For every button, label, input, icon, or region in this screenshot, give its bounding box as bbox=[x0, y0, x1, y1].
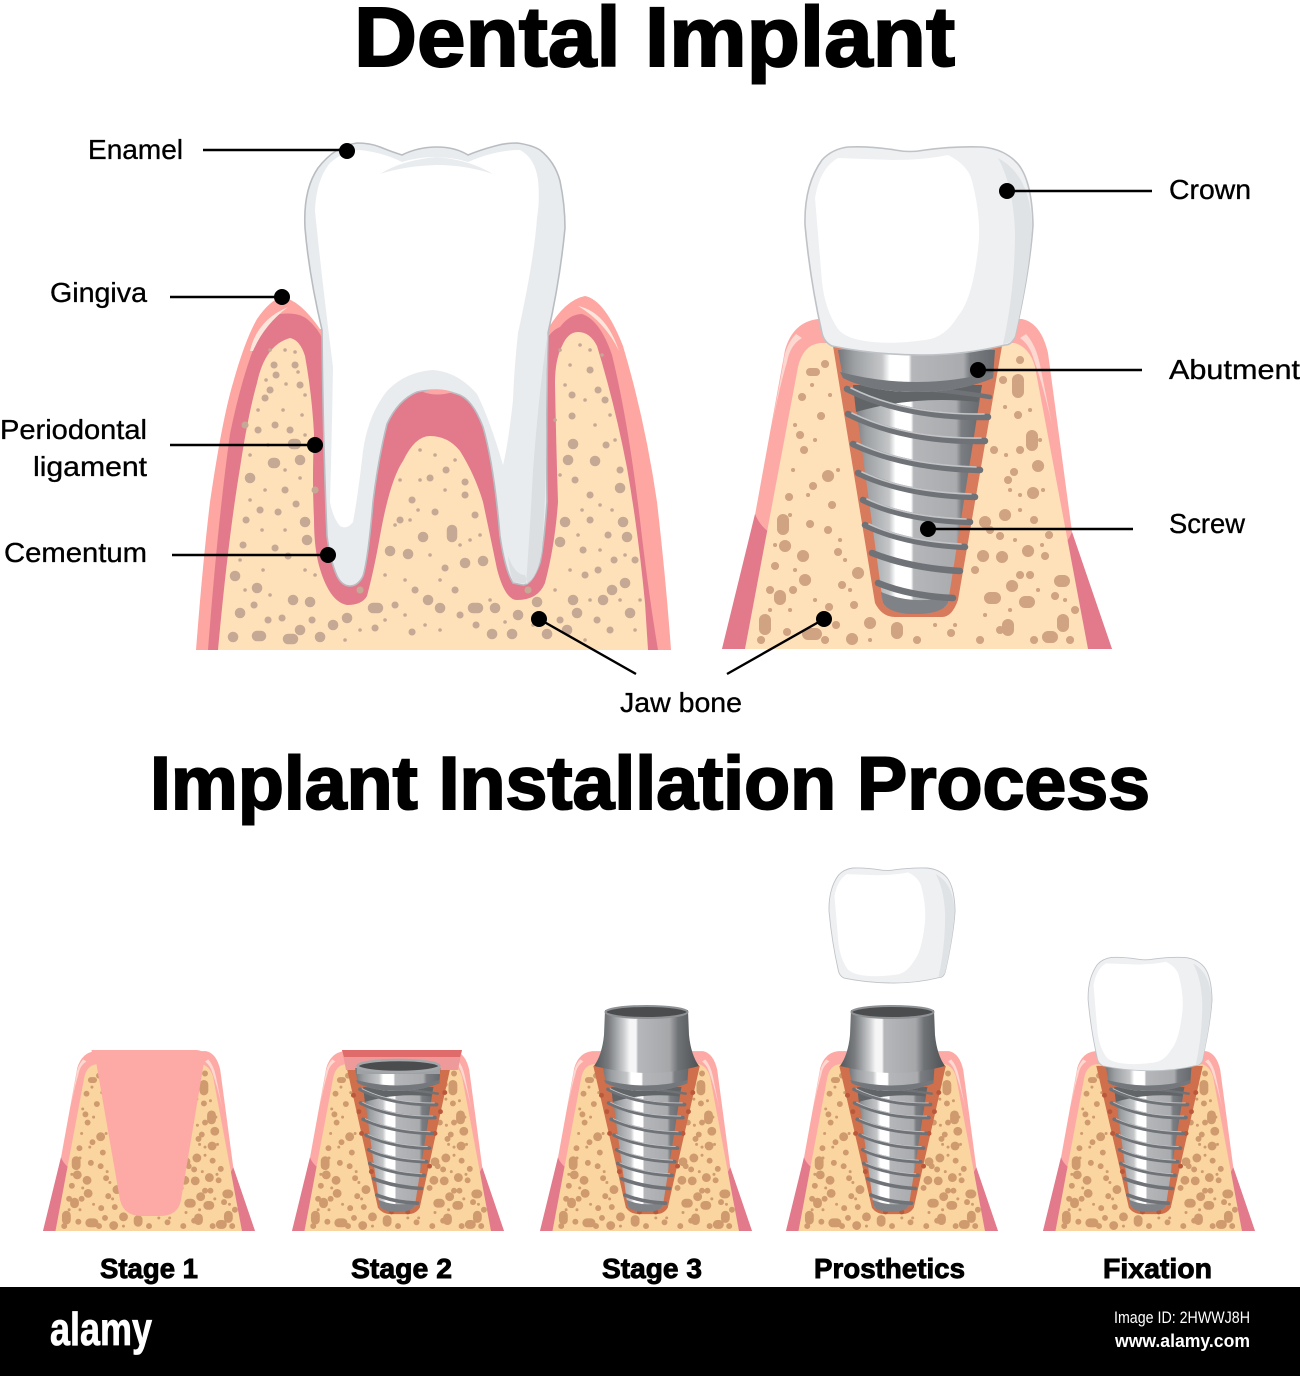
label: Gingiva: Gingiva bbox=[50, 277, 147, 308]
stage label: Stage 2: Stage 2 bbox=[351, 1253, 452, 1284]
label: Abutment bbox=[970, 354, 1300, 385]
label: Enamel: Enamel bbox=[88, 134, 183, 165]
stage label: Stage 3: Stage 3 bbox=[602, 1253, 702, 1284]
gum highlights bbox=[250, 306, 619, 351]
image id: Image ID: 2HWWJ8H bbox=[1114, 1308, 1250, 1327]
heading: Implant Installation Process: Implant Installation Process bbox=[150, 741, 1150, 825]
stage label: Stage 1: Stage 1 bbox=[100, 1253, 198, 1284]
label: Jaw bone bbox=[531, 611, 832, 718]
label: Screw bbox=[920, 508, 1246, 539]
bone specks bbox=[233, 345, 640, 640]
panel: implant anatomy bbox=[722, 147, 1112, 649]
label: Cementum: Cementum bbox=[4, 537, 147, 568]
stage label: Fixation: Fixation bbox=[1103, 1253, 1212, 1284]
crown bbox=[805, 147, 1033, 355]
label: Crown: Crown bbox=[1169, 174, 1251, 205]
label: Cementum bbox=[4, 537, 336, 568]
prosthetics diagram bbox=[786, 868, 998, 1231]
label: Periodontal ligament: ligament bbox=[33, 451, 147, 482]
website: www.alamy.com bbox=[1114, 1331, 1250, 1351]
panel: natural tooth anatomy bbox=[196, 143, 671, 650]
fixation diagram bbox=[1043, 957, 1255, 1231]
tooth white interior bbox=[315, 150, 539, 527]
interdental gum highlight bbox=[423, 390, 453, 394]
tooth shading bbox=[508, 332, 548, 584]
label: Enamel bbox=[88, 134, 355, 165]
stage 1 diagram bbox=[43, 1050, 255, 1231]
label: Gingiva bbox=[50, 277, 290, 308]
footer bar bbox=[0, 1287, 1300, 1376]
label: Abutment: Abutment bbox=[1169, 354, 1300, 385]
stage label: Prosthetics: Prosthetics bbox=[814, 1253, 965, 1284]
label: Crown bbox=[999, 174, 1251, 205]
label: Jaw bone: Jaw bone bbox=[620, 687, 742, 718]
label: Periodontal ligament bbox=[0, 414, 323, 482]
periodontal ligament bbox=[208, 314, 658, 650]
label: Periodontal ligament: Periodontal bbox=[0, 414, 147, 445]
stage 2 diagram bbox=[292, 1050, 504, 1231]
footer logo: alamy bbox=[50, 1303, 152, 1355]
gingiva bbox=[196, 296, 671, 650]
label: Screw: Screw bbox=[1169, 508, 1246, 539]
stage 3 diagram bbox=[540, 1006, 752, 1231]
jaw bone bbox=[218, 332, 648, 650]
natural tooth bbox=[305, 143, 565, 586]
